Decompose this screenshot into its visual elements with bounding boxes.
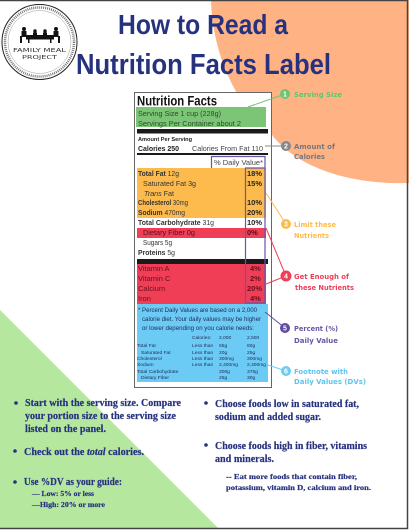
footnote table: 25g	[247, 350, 255, 356]
callout 6: footnote with daily values: Footnote with	[294, 368, 348, 376]
serving size band: Servings Per Container about 2	[138, 119, 241, 128]
vitamins and minerals band: Calcium	[138, 284, 165, 293]
callout 6: footnote with daily values	[268, 365, 366, 386]
callout 5: percent daily value: Daily Value	[294, 337, 338, 345]
footnote: * Percent Daily Values are based on a 2,000	[138, 307, 257, 314]
left tips column: your portion size to the serving size	[25, 411, 177, 422]
nutrient rows: Proteins 5g	[138, 248, 175, 257]
footnote table: 65g	[219, 343, 227, 349]
daily value percentages: 20%	[247, 208, 262, 217]
label heading: Nutrition Facts	[137, 93, 217, 109]
callout 4: get enough of these nutrients: 4	[284, 274, 288, 280]
vitamins and minerals band: 4%	[250, 264, 261, 273]
daily value percentages: 0%	[247, 228, 258, 237]
vitamins and minerals band: 4%	[250, 294, 261, 303]
left tips column: Start with the serving size. Compare	[25, 398, 182, 409]
footnote: or lower depending on you calorie needs:	[142, 325, 254, 332]
percent daily value outline: % Daily Value*	[214, 158, 263, 167]
panel: nutrition facts label	[134, 92, 272, 388]
vitamins and minerals band: 20%	[247, 284, 262, 293]
callout 2: amount of calories: Amount of	[294, 143, 336, 151]
title: How to Read a	[118, 9, 288, 40]
nutrient rows: Total Fat 12g	[138, 169, 179, 178]
right tips column: sodium and added sugar.	[215, 412, 321, 423]
callout 4: get enough of these nutrients: Get Enough of	[294, 273, 350, 281]
callout 3: limit these nutrients	[266, 193, 336, 240]
right tips column: potassium, vitamin D, calcium and iron.	[226, 483, 371, 492]
footnote	[137, 304, 268, 382]
nutrient rows	[137, 169, 266, 257]
footnote table: Less than	[192, 356, 213, 362]
logo text	[13, 48, 66, 61]
footnote table: 375g	[247, 369, 258, 375]
vitamins and minerals band: Iron	[138, 294, 151, 303]
left tips column: Check out the total calories.	[24, 447, 145, 458]
nutrient rows: Trans Fat	[144, 189, 175, 198]
calories section	[138, 137, 263, 153]
footnote table: Sodium	[137, 362, 154, 368]
footnote table: Total Carbohydrate	[137, 369, 179, 375]
footnote table: 300g	[219, 369, 230, 375]
nutrient rows: Dietary Fiber 0g	[143, 228, 195, 237]
vitamins and minerals band: 2%	[250, 274, 261, 283]
title	[76, 9, 331, 81]
icon: family at table	[20, 27, 60, 43]
callout 5: percent daily value: Percent (%)	[294, 325, 338, 333]
daily value percentages: 10%	[247, 218, 262, 227]
callout 5: percent daily value	[265, 312, 338, 345]
nutrient rows: Cholesterol 30mg	[138, 198, 188, 207]
footnote table: 300mg	[247, 356, 262, 362]
right tips column	[204, 399, 371, 492]
right tips column: Choose foods low in saturated fat,	[215, 399, 359, 410]
callout 1: serving size	[248, 89, 342, 107]
footnote table: 2,000	[219, 335, 232, 341]
callout 3: limit these nutrients: Nutrients	[294, 232, 329, 240]
callout 3: limit these nutrients: 3	[284, 222, 288, 228]
vitamins and minerals band	[137, 264, 266, 304]
footnote table: Less than	[192, 362, 213, 368]
footnote table: 80g	[247, 343, 255, 349]
left tips column: Use %DV as your guide:	[24, 477, 122, 488]
footnote table: Cholesterol	[137, 356, 162, 362]
logo: Family Meal Project	[2, 4, 77, 80]
right tips column: -- Eat more foods that contain fiber,	[226, 472, 357, 481]
footnote table	[137, 335, 266, 381]
footnote table: 20g	[219, 350, 227, 356]
limit nutrients band	[137, 168, 266, 218]
callout 1: serving size: 1	[283, 92, 287, 98]
footnote table: Less than	[192, 343, 213, 349]
daily value percentages: 10%	[247, 198, 262, 207]
daily value percentages: 18%	[247, 169, 262, 178]
callout 6: footnote with daily values: 6	[284, 368, 288, 376]
left tips column	[13, 398, 182, 509]
footnote table: 2,500	[247, 335, 260, 341]
calories section: Calories 250	[138, 144, 179, 153]
callout 2: amount of calories: Calories	[294, 153, 325, 161]
footnote table: 25g	[219, 375, 227, 381]
nutrient rows: Saturated Fat 3g	[143, 179, 196, 188]
daily value percentages: 15%	[247, 179, 262, 188]
green background triangle	[0, 310, 218, 528]
left tips column: listed on the panel.	[25, 424, 107, 435]
serving size band	[136, 107, 266, 128]
footnote table: Total Fat	[137, 343, 156, 349]
title: Nutrition Facts Label	[76, 49, 331, 81]
footnote: calorie diet. Your daily values may be higher	[142, 316, 262, 323]
callout 5: percent daily value: 5	[283, 326, 287, 332]
daily value percentages	[247, 169, 262, 237]
calories section: Amount Per Serving	[138, 137, 192, 143]
nutrient rows: Total Carbohydrate 31g	[138, 218, 214, 227]
callout 3: limit these nutrients: Limit these	[294, 221, 336, 229]
callout 2: amount of calories	[265, 141, 336, 161]
nutrient rows: Sugars 5g	[143, 238, 172, 247]
callout 4: get enough of these nutrients	[266, 228, 354, 292]
right tips column: Choose foods high in fiber, vitamins	[215, 441, 367, 452]
footnote table: Saturated Fat	[141, 350, 171, 356]
footnote table: Less than	[192, 350, 213, 356]
callout 2: amount of calories: 2	[284, 144, 288, 150]
percent daily value outline	[212, 156, 265, 303]
serving size band: Serving Size 1 cup (228g)	[138, 109, 221, 118]
footnote table: 2,400mg	[247, 362, 266, 368]
left tips column: — Low: 5% or less	[31, 489, 94, 498]
footnote table: 2,400mg	[219, 362, 238, 368]
calories section: Calories From Fat 110	[192, 144, 263, 153]
vitamins and minerals band: Vitamin C	[138, 274, 171, 283]
vitamins and minerals band: Vitamin A	[138, 264, 170, 273]
right tips column: and minerals.	[215, 454, 275, 465]
footnote table: 30g	[247, 375, 255, 381]
callout 1: serving size: Serving Size	[294, 91, 342, 99]
callout 6: footnote with daily values: Daily Values (DVs)	[294, 378, 366, 386]
orange background shape	[211, 0, 409, 183]
nutrient rows: Sodium 470mg	[138, 208, 185, 217]
footnote table: Calories:	[192, 335, 211, 341]
footnote table: Dietary Fiber	[141, 375, 169, 381]
logo text: PROJECT	[22, 55, 59, 61]
logo text: FAMILY MEAL	[13, 48, 66, 54]
callout 4: get enough of these nutrients: these Nutrients	[295, 284, 354, 292]
left tips column: —High: 20% or more	[31, 500, 106, 509]
footnote table: 300mg	[219, 356, 234, 362]
